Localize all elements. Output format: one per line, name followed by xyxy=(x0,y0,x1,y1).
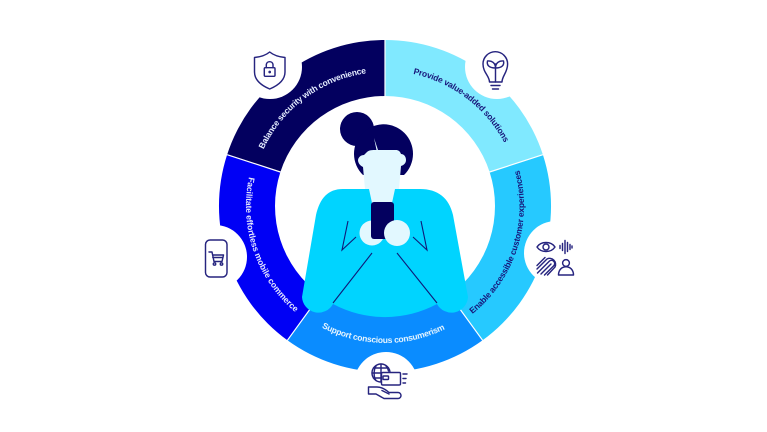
illustration: person holding a phone xyxy=(302,112,468,317)
panel: balance security segment xyxy=(227,40,385,172)
icon: phone with shopping cart xyxy=(206,240,227,277)
panel: value-added solutions segment xyxy=(385,40,543,172)
arm fold lines xyxy=(333,221,437,303)
label: enable accessible customer experiences: Enable accessible customer experiences xyxy=(469,170,526,314)
icon: globe, card and open hand xyxy=(368,364,407,398)
icon: lightbulb with leaves xyxy=(483,52,508,89)
right hand xyxy=(384,220,410,246)
phone xyxy=(371,202,394,239)
panel: conscious consumerism segment xyxy=(287,295,483,372)
left hand xyxy=(360,220,384,246)
label: facilitate effortless mobile commerce: Facilitate effortless mobile commerce xyxy=(246,178,298,312)
sweater xyxy=(302,189,468,317)
face and neck xyxy=(358,138,406,203)
hair bun xyxy=(340,112,374,146)
panel: accessible experiences segment xyxy=(450,155,551,340)
icon: eye, voice, fingerprint and person xyxy=(537,240,574,275)
icon: shield with padlock xyxy=(254,52,285,89)
hair xyxy=(354,124,413,175)
segment dividers and icon notches xyxy=(183,35,588,416)
label: provide value-added solutions: Provide value-added solutions xyxy=(414,68,508,142)
label: balance security with convenience: Balance security with convenience xyxy=(258,69,366,149)
panel: mobile commerce segment xyxy=(219,155,320,340)
label: support conscious consumerism: Support conscious consumerism xyxy=(322,323,445,344)
